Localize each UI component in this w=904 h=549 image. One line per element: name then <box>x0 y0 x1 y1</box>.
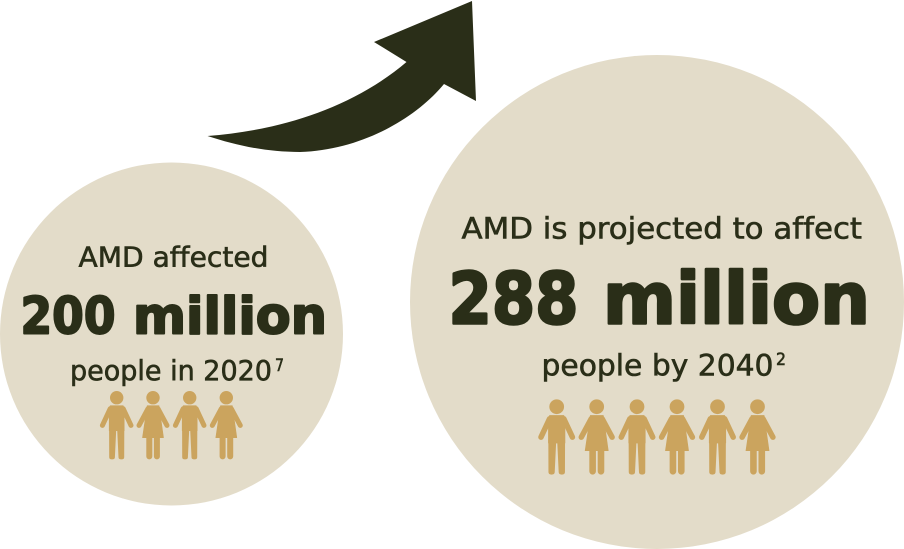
text: people by 2040: people by 2040 <box>542 348 774 382</box>
text: AMD affected: AMD affected <box>78 242 268 274</box>
footnote 2: 2 <box>776 350 786 370</box>
icon row: four people <box>102 391 240 459</box>
icon row: six people <box>541 399 773 475</box>
stat: 288 million: million <box>603 258 870 340</box>
footnote 7: 7 <box>275 356 284 376</box>
arrow <box>208 1 476 152</box>
text: AMD is projected to affect: AMD is projected to affect <box>462 212 862 246</box>
stat: 200 million <box>20 286 327 345</box>
panel: 2020 circle <box>0 162 343 506</box>
stat: 288 million <box>448 258 870 340</box>
stat: 288 million: 288 <box>448 258 578 340</box>
text: people in 2020: people in 2020 <box>70 355 272 387</box>
stat: 200 million: 200 <box>20 286 116 345</box>
stat: 200 million: million <box>133 286 327 345</box>
panel: 2040 circle <box>410 55 904 549</box>
